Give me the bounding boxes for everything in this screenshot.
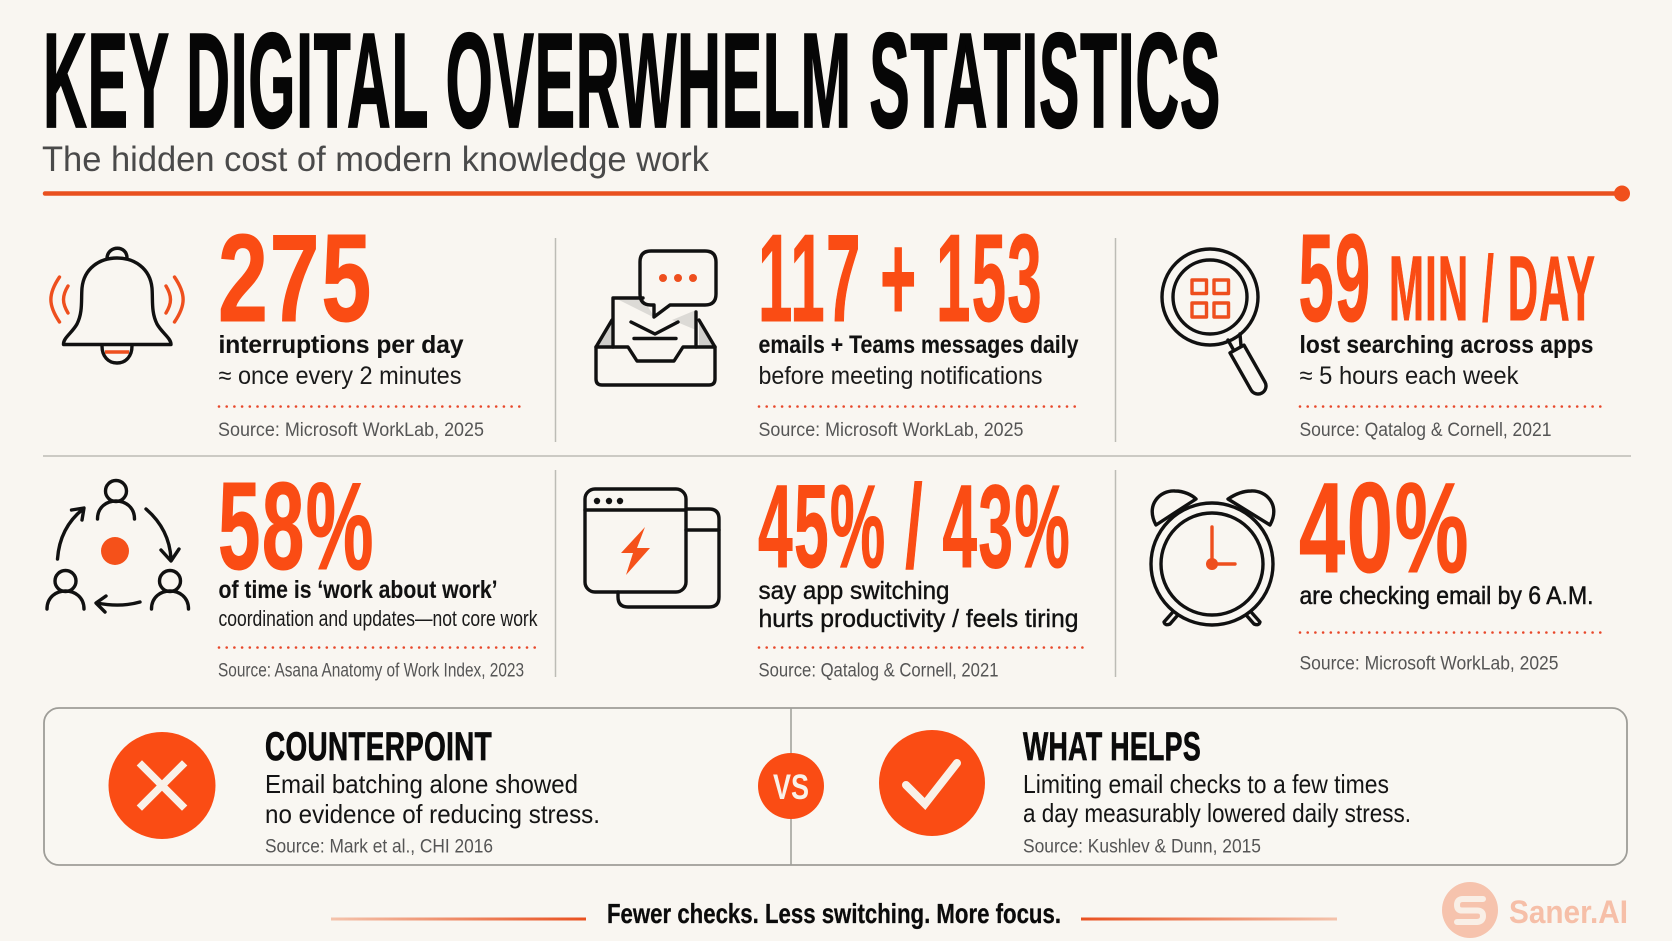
- stat detail: ≈ once every 2 minutes: [218, 362, 462, 390]
- counterpoint section: [108, 725, 600, 858]
- panel: app switching: [585, 461, 1087, 682]
- stat detail: hurts productivity / feels tiring: [758, 605, 1078, 633]
- header rule with end dot: [45, 186, 1630, 202]
- stat label: emails + Teams messages daily: [758, 331, 1079, 359]
- stat number: 45% / 43%: [758, 461, 1071, 593]
- source: Source: Microsoft WorkLab, 2025: [218, 420, 484, 441]
- panel: work about work: [47, 458, 538, 682]
- stat detail: before meeting notifications: [758, 362, 1042, 390]
- source: Source: Microsoft WorkLab, 2025: [1300, 654, 1558, 674]
- stat number: 59: [1298, 210, 1372, 348]
- source: Source: Microsoft WorkLab, 2025: [758, 420, 1024, 441]
- icon: ringing bell: [51, 248, 183, 363]
- body text line two: a day measurably lowered daily stress.: [1023, 798, 1411, 828]
- body text: Limiting email checks to a few times: [1023, 769, 1389, 799]
- stat label: interruptions per day: [218, 331, 464, 359]
- source: Source: Mark et al., CHI 2016: [265, 836, 493, 858]
- logo: Saner.AI watermark: [1442, 882, 1628, 938]
- body text line two: no evidence of reducing stress.: [265, 799, 600, 829]
- footer tagline: Fewer checks. Less switching. More focus.: [607, 898, 1061, 929]
- icon: check in circle: [879, 730, 985, 836]
- badge: VS: VS: [773, 768, 809, 807]
- what helps section: [879, 725, 1411, 858]
- stat number: 275: [218, 210, 373, 348]
- icon: alarm clock: [1151, 491, 1274, 625]
- panel: time lost searching: [1162, 210, 1605, 441]
- logo: Saner.AI watermark: Saner.AI: [1509, 894, 1628, 930]
- stat label: are checking email by 6 A.M.: [1300, 582, 1594, 610]
- subtitle: The hidden cost of modern knowledge work: [42, 140, 709, 179]
- stat label: say app switching: [758, 577, 950, 605]
- badge: VS: [758, 753, 824, 819]
- heading: COUNTERPOINT: [265, 725, 492, 769]
- stat detail: ≈ 5 hours each week: [1300, 362, 1519, 390]
- stat number: 58%: [218, 458, 375, 596]
- panel: comparison box: [44, 708, 1627, 865]
- panel: early email checking: [1151, 457, 1605, 674]
- panel: interruptions: [51, 210, 523, 441]
- source: Source: Kushlev & Dunn, 2015: [1023, 836, 1261, 858]
- icon: inbox tray with speech bubble: [596, 251, 716, 385]
- source: Source: Asana Anatomy of Work Index, 2023: [218, 660, 524, 682]
- panel: emails and messages: [596, 210, 1081, 441]
- stat label: lost searching across apps: [1300, 331, 1594, 359]
- panel: emails and messages: 117 + 153: [758, 210, 1043, 348]
- icon: cross in circle: [108, 732, 216, 839]
- footer tagline: [331, 898, 1337, 929]
- icon: overlapping app windows with bolt: [585, 489, 719, 607]
- icon: three people in a cycle: [47, 480, 188, 612]
- stat number: 40%: [1299, 457, 1470, 600]
- stat detail: coordination and updates—not core work: [218, 606, 538, 631]
- source: Source: Qatalog & Cornell, 2021: [758, 660, 998, 682]
- source: Source: Qatalog & Cornell, 2021: [1300, 420, 1552, 441]
- body text: Email batching alone showed: [265, 769, 578, 799]
- stat label: of time is ‘work about work’: [218, 576, 498, 604]
- heading: WHAT HELPS: [1023, 725, 1201, 769]
- icon: magnifying glass over app grid: [1162, 249, 1266, 394]
